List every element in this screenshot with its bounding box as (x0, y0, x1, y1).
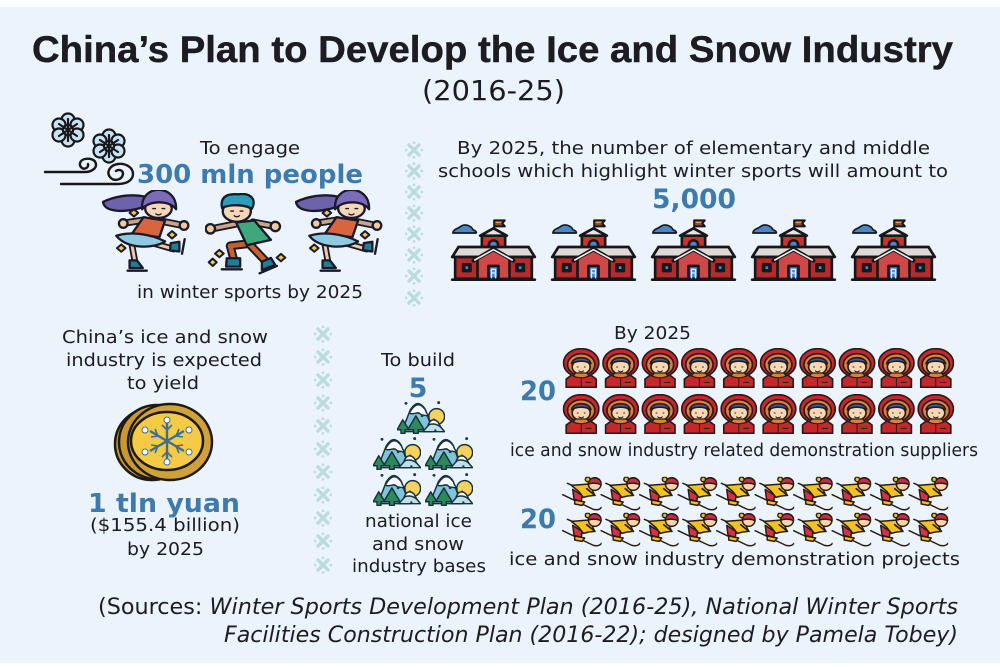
text: dollar equivalent: by 2025 (127, 540, 204, 560)
sources (98, 595, 958, 648)
panel: national bases (352, 351, 486, 577)
number: 5,000: 5,000 (652, 184, 736, 215)
icon: skiers (563, 477, 948, 546)
text: dollar equivalent (90, 516, 240, 560)
text: dollar equivalent: ($155.4 billion) (90, 516, 240, 536)
sources: (Sources: Winter Sports Development Plan (2016-25), National Winter Sports (98, 595, 958, 620)
panel: 300 million people (45, 114, 381, 303)
number: 300 mln people: 300 mln people (137, 160, 363, 190)
text: by 2025: By 2025 (614, 324, 691, 344)
icon: people in parkas (564, 349, 953, 433)
text: schools description: By 2025, the number of elementary and middle (457, 139, 930, 159)
panel: demonstration projects (509, 477, 960, 570)
text: national bases: industry bases (352, 557, 486, 577)
number: 20 projects: 20 (520, 504, 556, 535)
text: national bases: and snow (372, 535, 464, 555)
icon: schools (452, 220, 935, 280)
text: industry yield: to yield (127, 374, 199, 394)
text: suppliers: ice and snow industry related demonstration suppliers (510, 441, 978, 461)
text: industry yield: industry is expected (66, 351, 262, 371)
text: in winter sports: in winter sports by 2025 (137, 283, 363, 303)
number: 1 tln yuan: 1 tln yuan (88, 489, 240, 519)
text: projects: ice and snow industry demonstration projects (509, 550, 960, 570)
divider: top snowflakes (405, 141, 423, 307)
text: industry yield (62, 328, 268, 394)
text: national bases (352, 512, 486, 577)
divider: bottom snowflakes (314, 325, 332, 574)
text: industry yield: China’s ice and snow (62, 328, 268, 348)
icon: gold coin with snowflake (115, 404, 212, 480)
sources: Facilities Construction Plan (2016-22); designed by Pamela Tobey) (224, 623, 958, 648)
panel: demonstration suppliers (510, 324, 978, 461)
text: national bases: national ice (365, 512, 472, 532)
number: 20 suppliers: 20 (520, 376, 556, 407)
text: to build: To build (380, 351, 455, 371)
subtitle: (2016-25) (422, 74, 565, 107)
title: China’s Plan to Develop the Ice and Snow Industry (32, 29, 953, 70)
text: schools description (438, 139, 948, 182)
text: schools description: schools which highlight winter sports will amount to (438, 162, 948, 182)
panel: 1 trillion yuan (62, 328, 268, 560)
icon: snowy mountains (373, 401, 473, 505)
icon: skaters (103, 190, 381, 273)
icon: snowflakes and wind (45, 114, 133, 184)
text: to engage: To engage (199, 139, 300, 159)
panel: 5,000 schools (438, 139, 948, 280)
number: 5: 5 (409, 373, 427, 404)
